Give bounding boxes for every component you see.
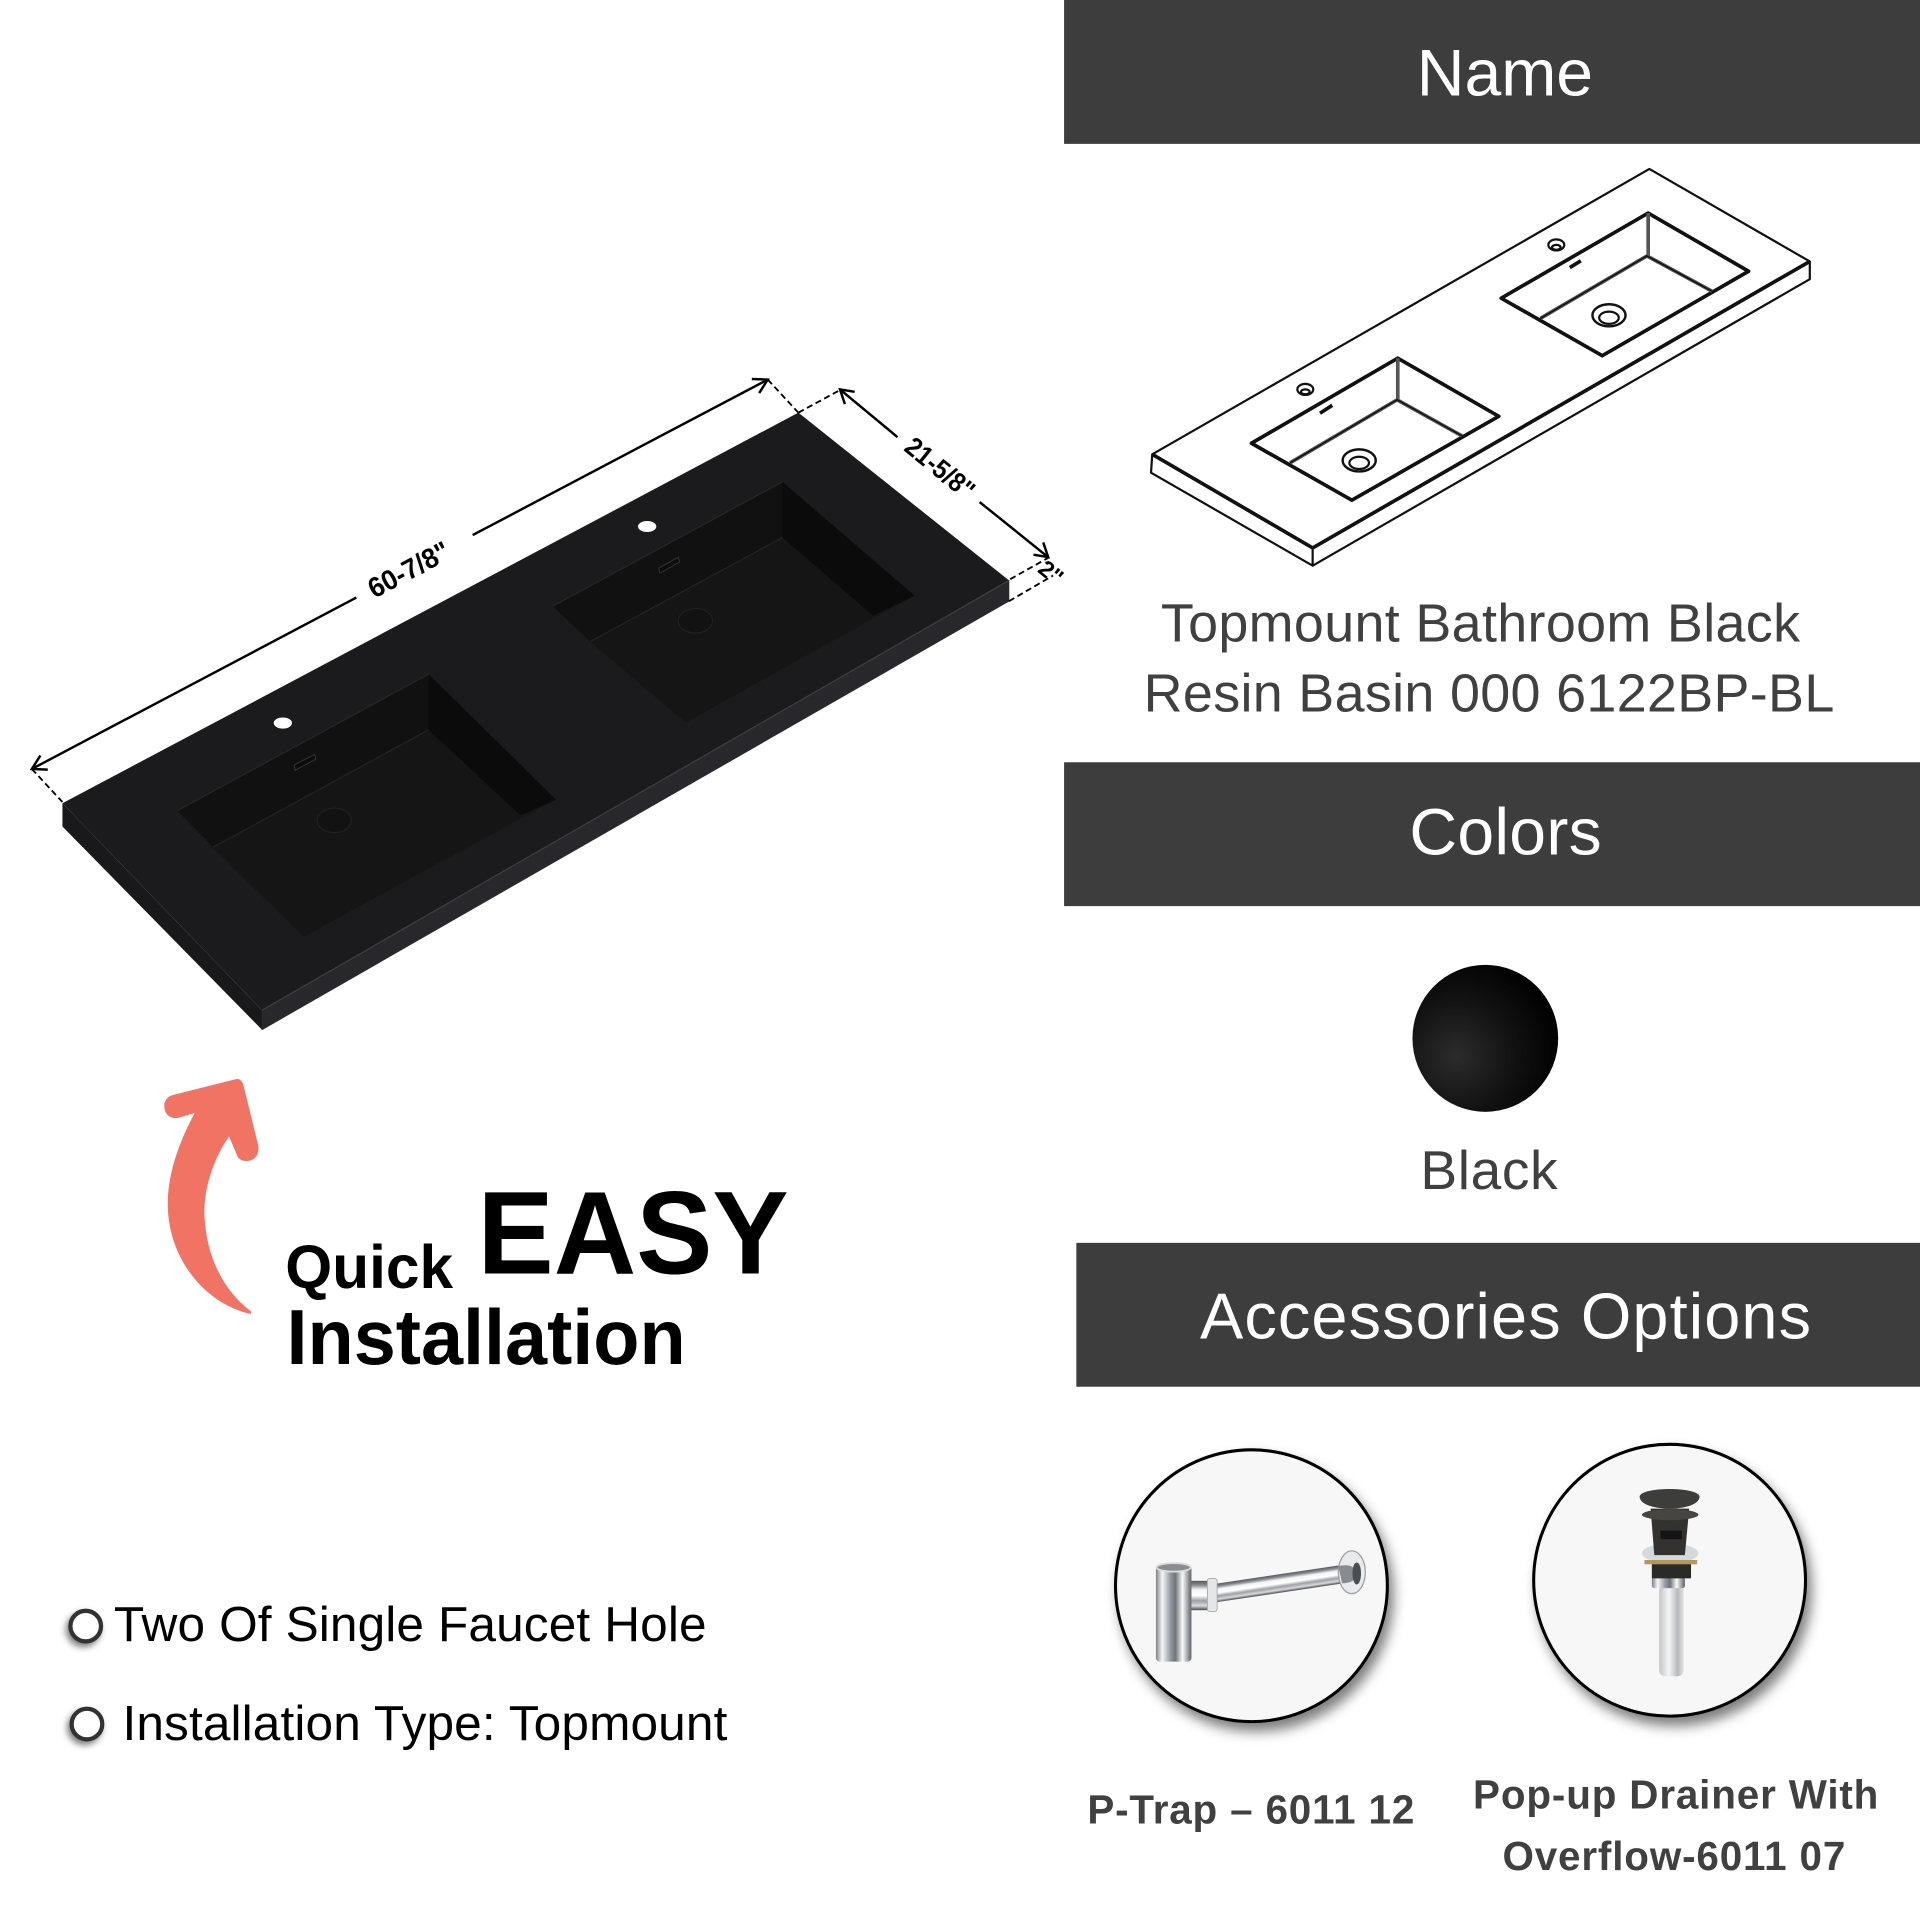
left basin (178, 674, 556, 937)
heading: Quick EASY Installation: Quick (285, 1233, 454, 1301)
heading: Quick EASY Installation: EASY (478, 1167, 789, 1298)
dimension: thickness 2: 2" (1034, 555, 1069, 590)
front edge highlight (262, 580, 1009, 1010)
overflow slots (294, 754, 316, 770)
counter top face (62, 413, 1009, 1010)
header: Accessories Options (1076, 1243, 1920, 1387)
line drawing: double-basin top (1151, 169, 1810, 566)
right basin outline (1501, 213, 1749, 356)
icon: P-Trap pipe (1156, 1551, 1365, 1662)
circle background (1534, 1444, 1806, 1716)
color swatch: black: Black (1420, 1139, 1558, 1201)
counter front side face (262, 580, 1009, 1030)
bullet: faucet hole: Two Of Single Faucet Hole (114, 1596, 707, 1652)
dimension: thickness 2 (1009, 555, 1069, 601)
product name text (1144, 594, 1834, 723)
faucet holes (274, 718, 292, 729)
color swatch: black (1412, 965, 1558, 1201)
arrow: curved coral (164, 1079, 258, 1314)
header: Accessories Options: Accessories Options (1200, 1279, 1811, 1352)
dimension: depth 21-5/8 (798, 389, 1048, 557)
feature list (70, 1596, 728, 1751)
header: Colors (1064, 762, 1920, 906)
accessory: Pop-up Drainer (1473, 1444, 1878, 1879)
heading: Quick EASY Installation: Installation (287, 1293, 686, 1381)
counter left side face (62, 803, 262, 1030)
right basin (553, 482, 915, 722)
header: Name: Name (1417, 37, 1593, 111)
dimension: depth 21-5/8: 21-5/8" (899, 431, 981, 505)
dimension: width 60-7/8: 60-7/8" (363, 535, 455, 604)
dimension: width 60-7/8 (32, 379, 798, 802)
accessory: Pop-up Drainer: Overflow-6011 07 (1502, 1833, 1845, 1879)
accessory: P-Trap (1087, 1450, 1414, 1832)
left basin outline (1251, 358, 1499, 500)
product name text: Topmount Bathroom Black (1161, 594, 1801, 654)
header: Name (1064, 0, 1920, 144)
bullet: installation type: Installation Type: Topmount (122, 1695, 728, 1751)
product name text: Resin Basin 000 6122BP-BL (1144, 663, 1834, 723)
heading: Quick EASY Installation (285, 1167, 789, 1381)
accessory: P-Trap: P-Trap – 6011 12 (1087, 1786, 1414, 1832)
drains (317, 808, 351, 833)
header: Colors: Colors (1409, 796, 1602, 870)
product render: black double-basin counter (62, 413, 1009, 1030)
accessory: Pop-up Drainer: Pop-up Drainer With (1473, 1772, 1878, 1818)
circle background (1116, 1450, 1387, 1722)
icon: pop-up drain (1640, 1489, 1700, 1676)
